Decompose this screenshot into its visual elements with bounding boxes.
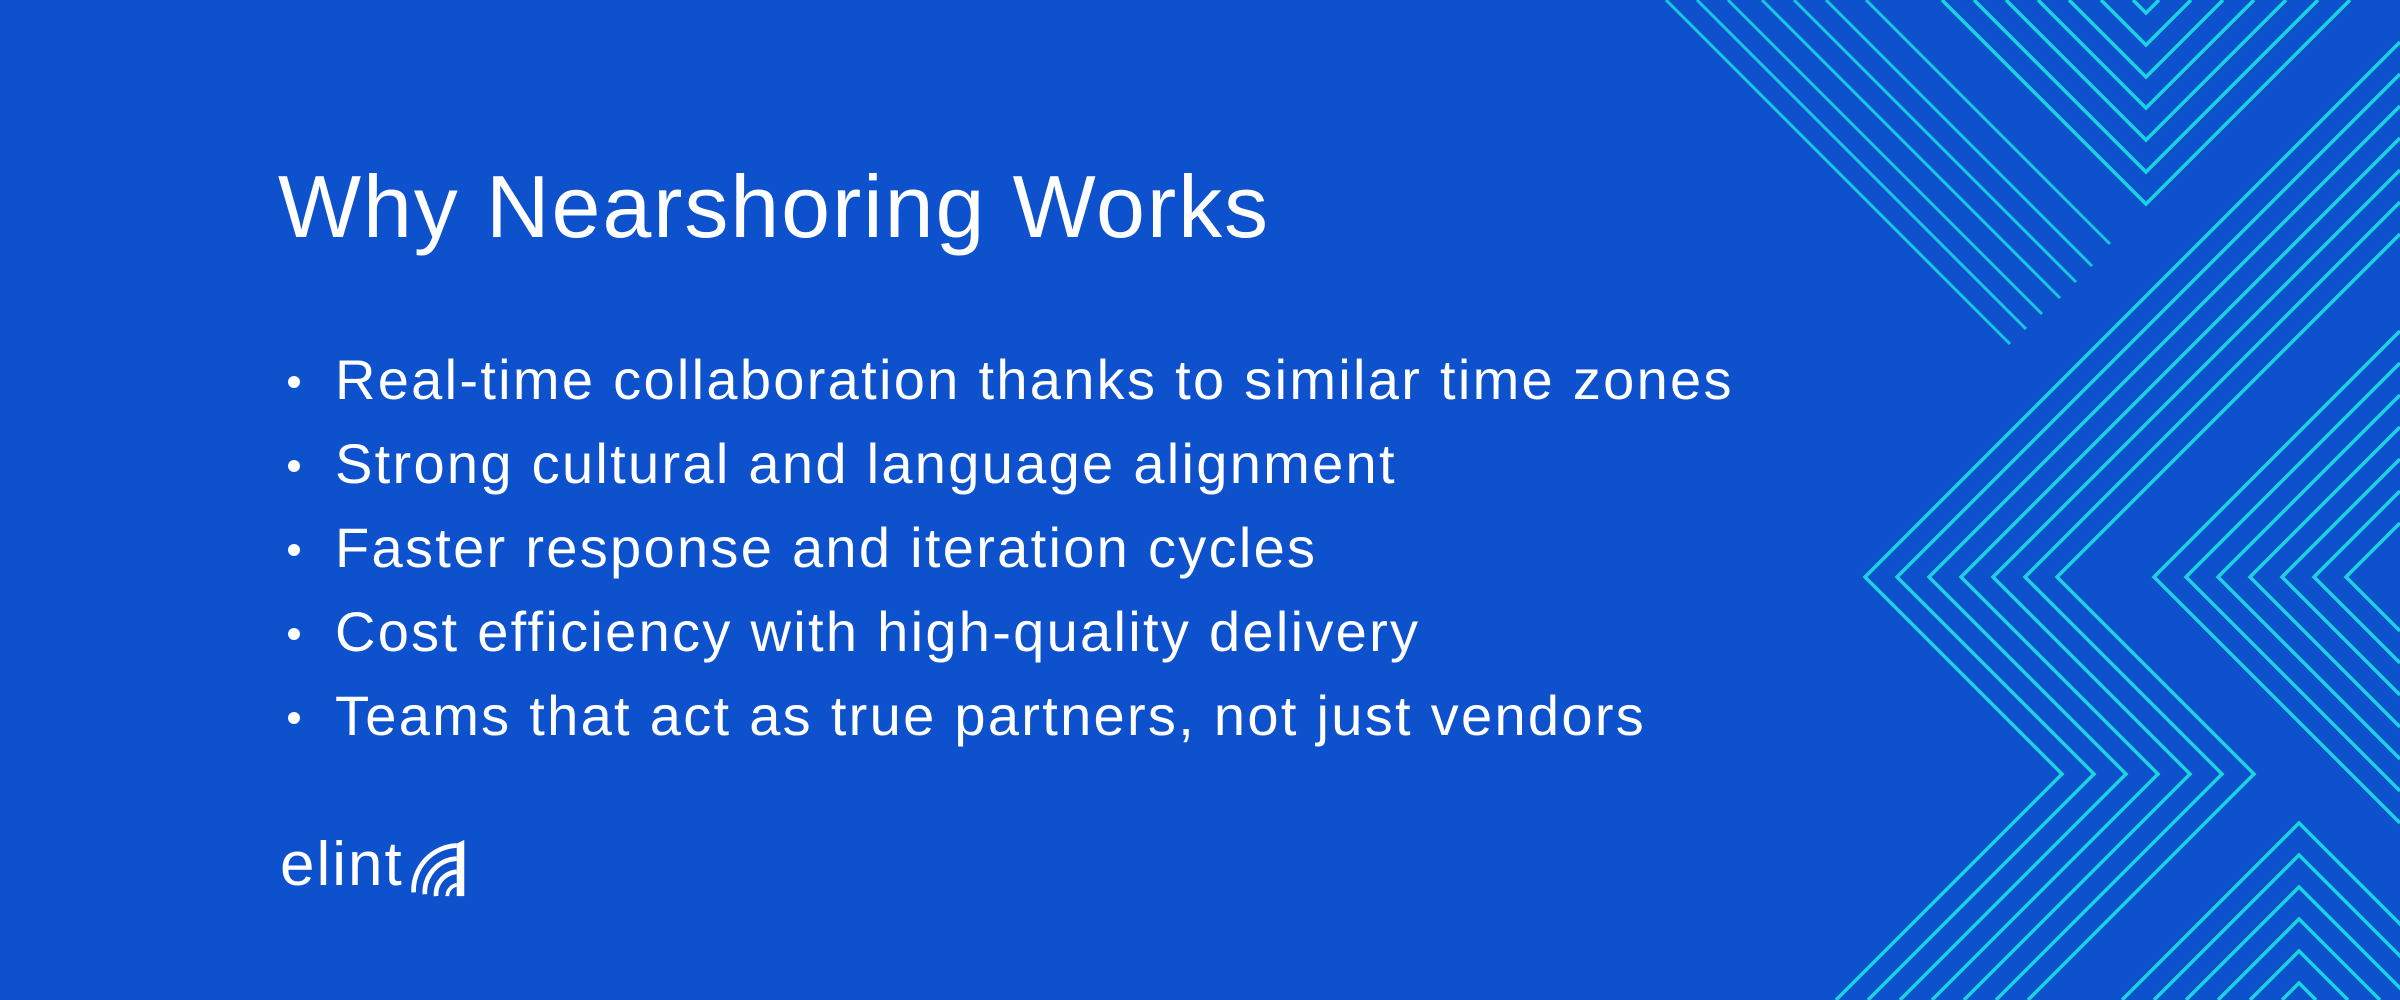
bullet 3: Faster response and iteration cycles xyxy=(335,516,1317,579)
title: Why Nearshoring Works xyxy=(278,157,1270,256)
logo: elint: elint xyxy=(280,830,404,899)
icon: signal arcs xyxy=(411,840,464,896)
bullet 4: Cost efficiency with high-quality delivery xyxy=(335,600,1420,663)
bullet 1: Real-time collaboration thanks to similar time zones xyxy=(335,348,1734,411)
logo: elint xyxy=(280,830,464,899)
bullet 2: Strong cultural and language alignment xyxy=(335,432,1397,495)
bullet 5: Teams that act as true partners, not just vendors xyxy=(335,684,1646,747)
bullet list xyxy=(288,348,1734,747)
